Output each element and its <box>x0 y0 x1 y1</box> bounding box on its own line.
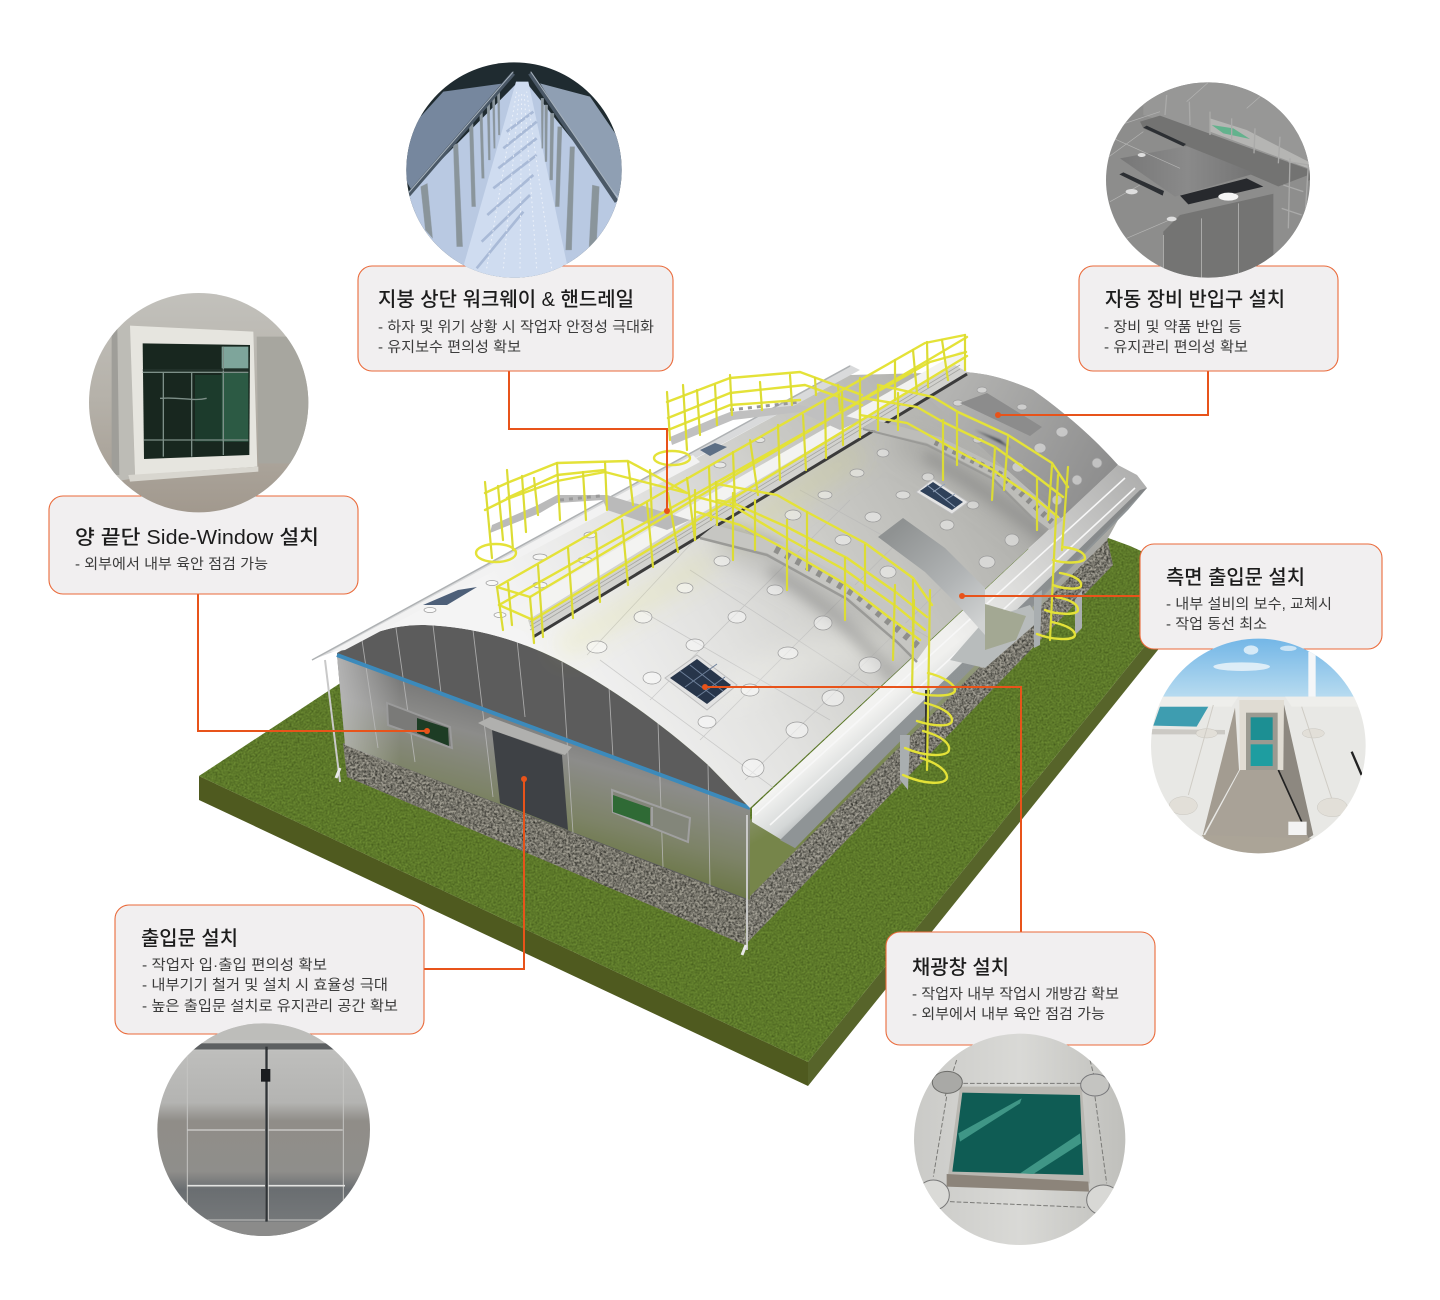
side wall <box>748 480 1140 898</box>
side foundation: stone <box>745 538 1113 945</box>
walkway: ridge deck <box>503 350 967 637</box>
box C <box>49 496 358 594</box>
body A: - 유지보수 편의성 확보 <box>378 339 521 356</box>
window: left side <box>387 703 452 748</box>
photo: side door <box>1151 638 1366 854</box>
roof: soft shading <box>560 440 1065 700</box>
handrail: right stair front <box>695 482 932 770</box>
callout F: skylight <box>702 684 1155 1045</box>
dot C <box>424 728 430 734</box>
heading E: 출입문 설치 <box>141 927 238 950</box>
skylight: distant left <box>423 587 477 605</box>
platform: green lawn base <box>199 535 1200 1086</box>
dot A <box>664 508 670 514</box>
heading C: 양 끝단 Side-Window 설치 <box>75 526 319 549</box>
dot D <box>959 593 965 599</box>
roof: main arched surface <box>337 372 1118 808</box>
box F <box>886 932 1155 1045</box>
side door housing <box>878 518 1026 650</box>
callout A: roof walkway <box>358 266 673 514</box>
yellow handrails <box>476 335 1085 783</box>
ladder supports <box>900 590 1082 790</box>
stairs: right side front <box>700 525 930 662</box>
handrail: ridge walkway <box>497 335 967 643</box>
leader line A <box>509 371 667 511</box>
stairs: right side rear <box>863 420 1063 530</box>
handrail: right stair rear <box>860 385 1068 640</box>
body D <box>1166 596 1332 633</box>
leader line D <box>962 595 1140 597</box>
roof caps <box>424 387 1102 777</box>
photo: side window <box>89 293 308 512</box>
photo: equipment hatch <box>1106 82 1310 278</box>
heading D: 측면 출입문 설치 <box>1166 566 1305 589</box>
leader line C <box>198 594 427 731</box>
heading B: 자동 장비 반입구 설치 <box>1105 288 1285 311</box>
eave gutter <box>752 465 1147 848</box>
leader line B <box>998 371 1208 415</box>
skylight: distant rear <box>700 443 727 456</box>
leader line E <box>424 779 524 969</box>
body B <box>1104 319 1248 356</box>
window: right side <box>612 790 690 842</box>
front foundation: stone <box>343 743 747 945</box>
body A <box>378 319 654 356</box>
body A: - 하자 및 위기 상황 시 작업자 안정성 극대화 <box>378 319 654 336</box>
heading A: 지붕 상단 워크웨이 & 핸드레일 <box>378 288 634 311</box>
body D: - 작업 동선 최소 <box>1166 616 1267 633</box>
dot F <box>702 684 708 690</box>
dot E <box>521 776 527 782</box>
door: main entrance <box>478 717 572 830</box>
photo: roof walkway <box>406 62 622 278</box>
handrail: left stair front <box>476 461 687 562</box>
end wall: blue band <box>337 655 750 808</box>
body F <box>912 986 1119 1023</box>
box D <box>1140 544 1382 649</box>
body C: - 외부에서 내부 육안 점검 가능 <box>75 556 268 573</box>
body E: - 작업자 입·출입 편의성 확보 <box>142 957 327 974</box>
box B <box>1079 266 1338 371</box>
callout B: equipment hatch <box>995 266 1338 418</box>
photo: entrance door <box>157 1023 370 1236</box>
ladder loops: rear <box>1037 547 1085 639</box>
photo: skylight detail <box>914 1034 1126 1245</box>
building: greenhouse structure <box>312 350 1147 955</box>
handrail: left stair rear <box>654 372 862 465</box>
roof: rear dark section <box>925 372 1118 520</box>
body E: - 높은 출입문 설치로 유지관리 공간 확보 <box>142 998 398 1015</box>
stairs: left side rear <box>670 402 862 445</box>
body F: - 외부에서 내부 육안 점검 가능 <box>912 1006 1105 1023</box>
box E <box>115 905 424 1034</box>
corner posts <box>325 660 747 955</box>
auto-equipment hatch <box>945 393 1042 448</box>
body E <box>142 957 398 1015</box>
ladder loops: front <box>903 673 955 783</box>
heading F: 채광창 설치 <box>912 956 1009 979</box>
dot B <box>995 412 1001 418</box>
roof: left strip eave <box>312 365 860 660</box>
box A <box>358 266 673 371</box>
skylight: rear <box>916 479 968 514</box>
roof: shadow under stairs <box>715 455 1055 680</box>
body E: - 내부기기 철거 및 설치 시 효율성 극대 <box>142 977 388 994</box>
body B: - 유지관리 편의성 확보 <box>1104 339 1248 356</box>
leader line F <box>705 687 1021 932</box>
end wall: gable <box>337 625 750 900</box>
callout E: entrance door <box>115 776 527 1034</box>
callout C: side window <box>49 496 430 734</box>
body D: - 내부 설비의 보수, 교체시 <box>1166 596 1332 613</box>
body B: - 장비 및 약품 반입 등 <box>1104 319 1242 336</box>
body F: - 작업자 내부 작업시 개방감 확보 <box>912 986 1119 1003</box>
callout D: side door <box>959 544 1382 649</box>
stairs: left side front <box>490 495 690 533</box>
roof: panel seams <box>587 470 1000 800</box>
skylight: front <box>665 655 737 710</box>
